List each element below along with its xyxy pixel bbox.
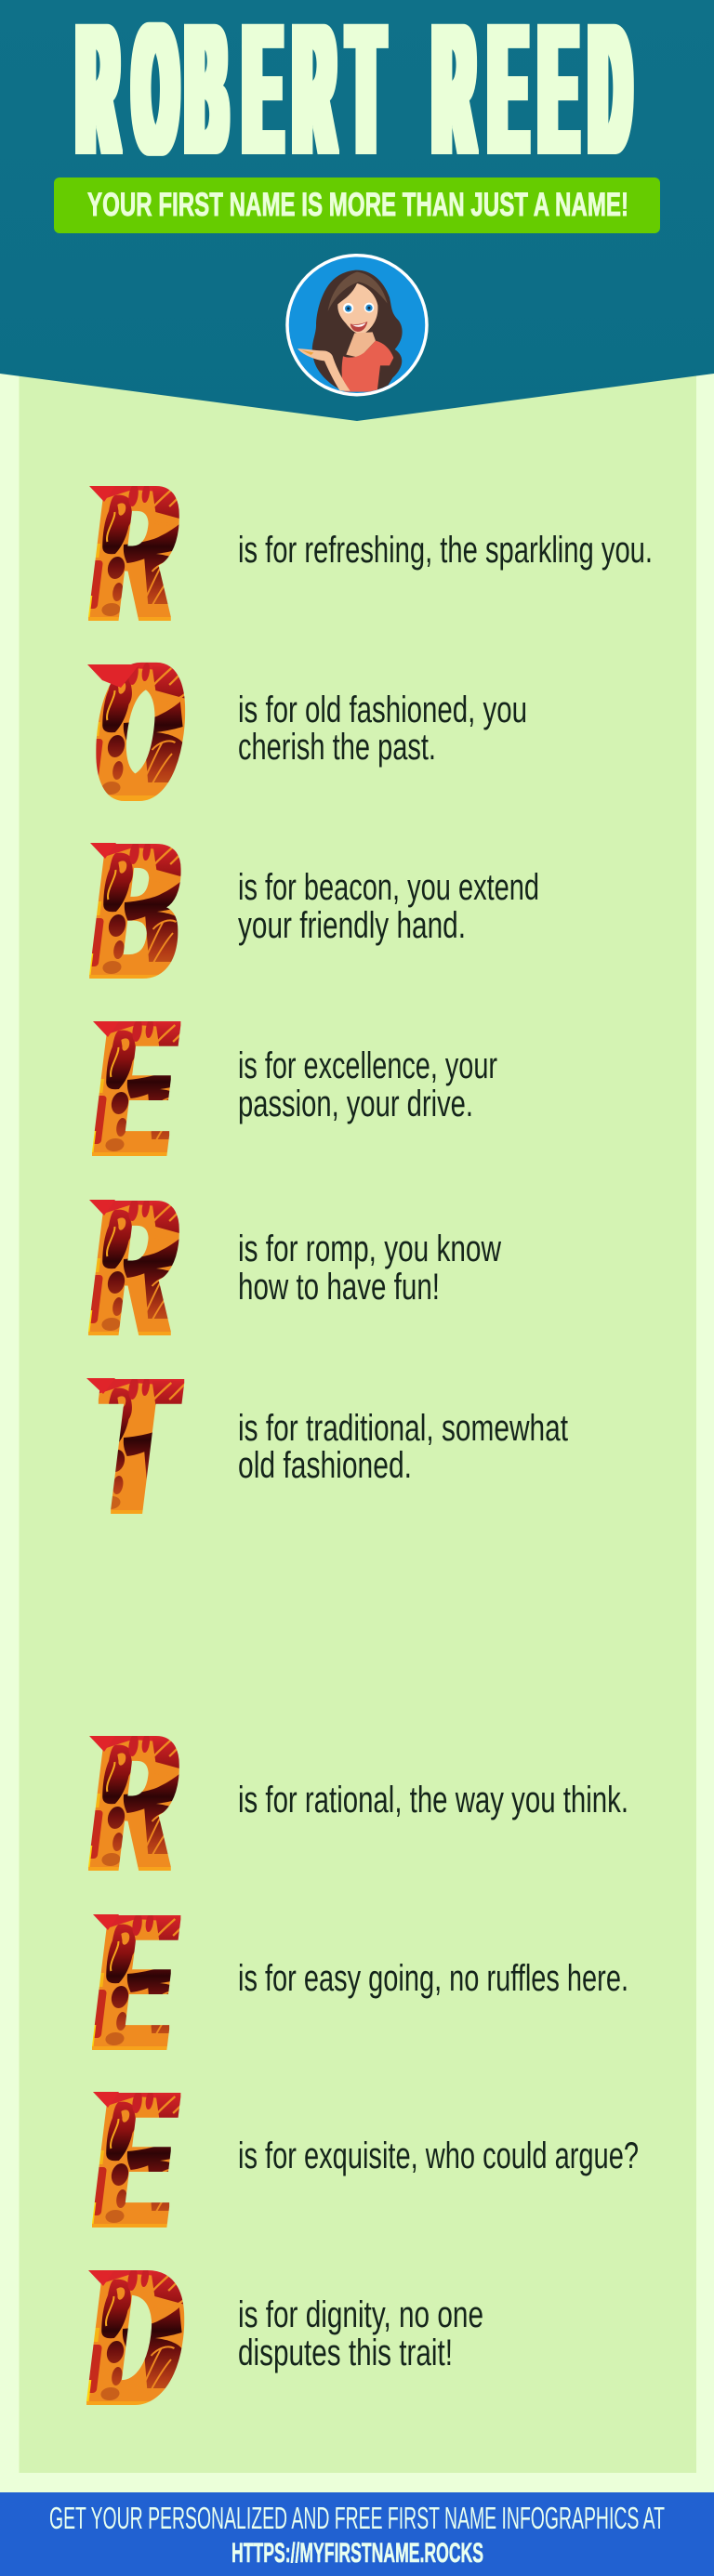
letter E	[92, 1914, 180, 2050]
text: old fashioned: cherish the past.	[238, 727, 436, 768]
text: dignity: is for dignity, no one	[238, 2294, 483, 2335]
letter T	[86, 1378, 184, 1514]
text: excellence: passion, your drive.	[238, 1084, 473, 1124]
text: romp: how to have fun!	[238, 1267, 440, 1308]
letter R	[88, 1736, 179, 1871]
text: romp: is for romp, you know	[238, 1229, 501, 1269]
header banner	[0, 0, 714, 421]
item: R rational	[88, 1736, 627, 1871]
text: old fashioned	[238, 690, 527, 768]
footer	[0, 2492, 714, 2576]
text: dignity	[238, 2294, 483, 2373]
letter R	[88, 486, 179, 621]
text: romp	[238, 1229, 501, 1308]
item: E excellence	[92, 1021, 496, 1156]
panel: letters	[19, 367, 696, 2473]
item: E exquisite	[92, 2092, 638, 2228]
letter D	[86, 2270, 184, 2405]
text: beacon: is for beacon, you extend	[238, 867, 539, 908]
subtitle bar	[54, 177, 660, 233]
item: R refreshing	[88, 486, 651, 621]
text: excellence	[238, 1045, 497, 1124]
item: O old fashioned	[87, 662, 526, 801]
item: B beacon	[89, 843, 537, 979]
letter E	[92, 2092, 180, 2228]
footer url: HTTPS://MYFIRSTNAME.ROCKS	[231, 2538, 483, 2569]
icon: woman avatar	[287, 256, 427, 395]
text: beacon: your friendly hand.	[238, 905, 466, 946]
text: old fashioned: is for old fashioned, you	[238, 690, 527, 730]
letter B	[89, 843, 181, 979]
text: dignity: disputes this trait!	[238, 2333, 453, 2373]
item: R romp	[88, 1200, 502, 1335]
text: beacon	[238, 867, 539, 946]
text: traditional	[238, 1408, 568, 1486]
letter E	[92, 1021, 180, 1156]
letter O	[87, 662, 186, 801]
item: T traditional	[86, 1378, 568, 1514]
item: E easy going	[92, 1914, 627, 2050]
text: excellence: is for excellence, your	[238, 1045, 497, 1086]
item: D dignity	[86, 2270, 483, 2405]
text: traditional: is for traditional, somewhat	[238, 1408, 568, 1449]
letter R	[88, 1200, 179, 1335]
text: traditional: old fashioned.	[238, 1445, 412, 1486]
